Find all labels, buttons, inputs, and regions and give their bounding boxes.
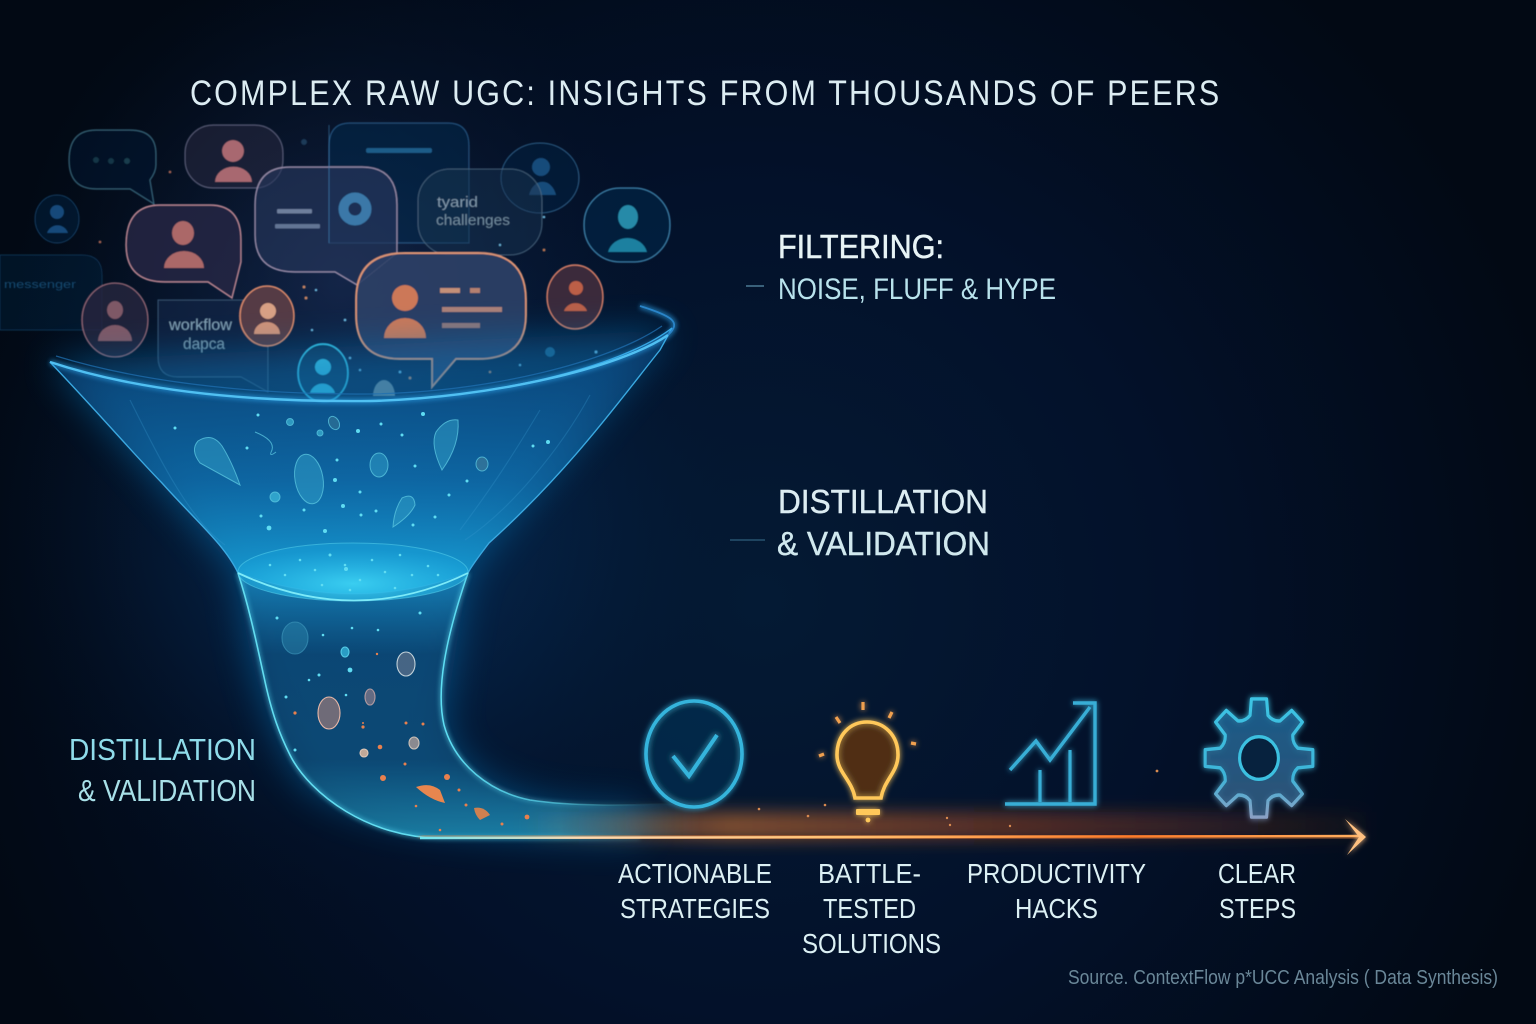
label: productivity hacks <box>967 858 1146 924</box>
icon: gear <box>1205 699 1313 817</box>
funnel rim <box>50 306 674 401</box>
floating sparks <box>174 412 550 752</box>
label: clear steps: STEPS <box>1219 893 1296 924</box>
bubble: workflow <box>158 300 268 392</box>
bubble: cyan circle <box>298 344 348 402</box>
label: distillation left: DISTILLATION <box>69 732 256 767</box>
funnel cone <box>50 328 672 594</box>
sparks among bubbles <box>99 139 598 380</box>
bubble: circle person left <box>82 283 148 357</box>
funnel inner facets <box>130 395 590 545</box>
bubble: workflow: workflow <box>168 317 232 334</box>
icon: light bulb <box>819 702 916 822</box>
arrow sparks <box>758 770 1158 827</box>
label: distillation right <box>730 483 990 562</box>
bubble: dots <box>69 130 156 204</box>
bubble: faint circle left <box>35 195 79 243</box>
bubble: large blue back <box>329 123 469 243</box>
funnel glow <box>50 330 672 838</box>
bubble: tyarid challenges: tyarid <box>437 194 478 211</box>
orange sparks <box>293 653 529 831</box>
bubble: red person <box>126 205 241 298</box>
bubble: faint left message: messenger <box>4 279 76 291</box>
floating noise shapes in cone <box>194 414 488 527</box>
label: actionable strategies <box>618 858 772 924</box>
label: distillation left <box>69 732 256 808</box>
bubble: orange highlighted <box>356 253 526 387</box>
label: distillation right: & VALIDATION <box>777 525 990 562</box>
label: battle-tested solutions: BATTLE- <box>818 858 921 889</box>
label: distillation left: & VALIDATION <box>78 773 256 808</box>
label: actionable strategies: ACTIONABLE <box>618 858 772 889</box>
funnel <box>50 306 700 838</box>
output arrow <box>420 812 1366 855</box>
bubble: tyarid challenges <box>418 169 542 255</box>
bubble: faint left message <box>0 255 102 330</box>
label: productivity hacks: HACKS <box>1015 893 1098 924</box>
label: clear steps <box>1218 858 1296 924</box>
label: filtering: FILTERING: <box>778 228 944 265</box>
label: actionable strategies: STRATEGIES <box>620 893 770 924</box>
bubble: workflow: dapca <box>183 336 225 353</box>
label: battle-tested solutions: SOLUTIONS <box>802 928 941 959</box>
label: clear steps: CLEAR <box>1218 858 1296 889</box>
bubble: orange circle <box>240 286 294 346</box>
bubble: circle blue <box>501 143 579 213</box>
bubble: centre with ring <box>255 125 397 285</box>
bubble: person <box>185 125 283 188</box>
bubble: circle cyan <box>584 188 670 262</box>
icon: check circle <box>646 701 742 807</box>
funnel tube <box>238 573 700 838</box>
label: productivity hacks: PRODUCTIVITY <box>967 858 1146 889</box>
bubble: tyarid challenges: challenges <box>436 212 510 229</box>
label: filtering <box>746 228 1056 306</box>
funnel neck ellipse <box>238 543 468 601</box>
bubble: orange circle right <box>547 265 603 329</box>
label: battle-tested solutions <box>802 858 941 959</box>
tube particles <box>282 622 490 820</box>
label: battle-tested solutions: TESTED <box>823 893 916 924</box>
label: distillation right: DISTILLATION <box>778 483 988 520</box>
icon: growth chart <box>1005 703 1095 804</box>
label: filtering: NOISE, FLUFF & HYPE <box>778 273 1056 306</box>
bubble: small grey person <box>373 380 395 396</box>
cloud of raw user content bubbles <box>0 123 670 402</box>
title: COMPLEX RAW UGC: INSIGHTS FROM THOUSANDS OF PEERS <box>190 73 1219 112</box>
